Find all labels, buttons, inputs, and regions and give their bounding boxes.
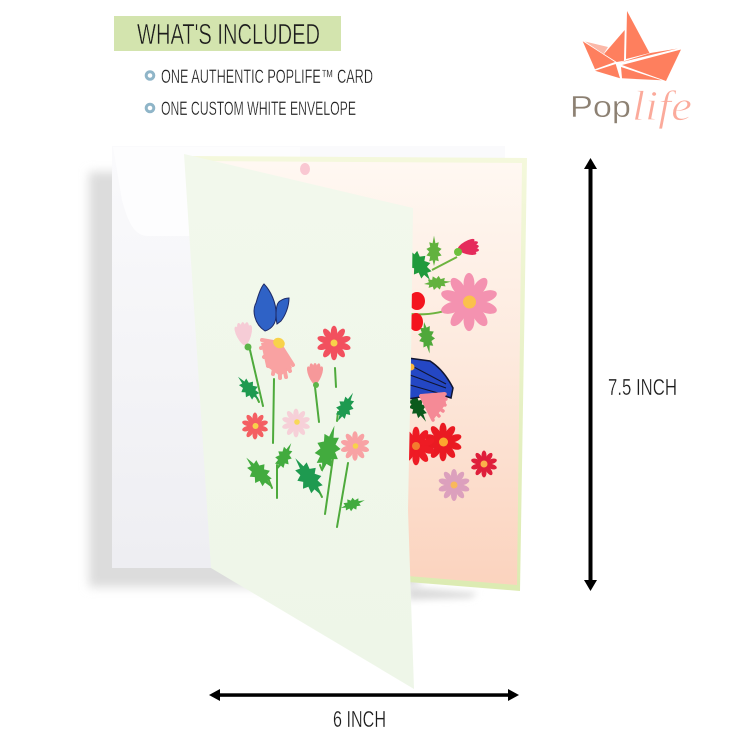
item 1: ONE AUTHENTIC POPLIFE™ CARD [161,67,373,88]
butterfly [254,284,289,331]
pale tulip [232,321,256,350]
envelope body [112,146,505,568]
pink fan flower [421,392,446,420]
blue butterfly [408,358,453,399]
panel: envelope with shadow [89,146,505,587]
red daisy [317,326,351,360]
coral tulip [305,363,325,388]
leaves [399,236,452,426]
heading text: WHAT'S INCLUDED [137,19,320,51]
pale daisy [281,409,311,437]
logo: poplife [570,11,692,130]
red tulip [454,236,480,259]
bullet 2 [146,104,154,112]
height dimension arrow [584,158,597,591]
wordmark life: life [632,84,692,130]
card pink interior [190,161,522,585]
width label: 6 INCH [333,706,386,732]
wordmark pop: Pop [570,89,631,124]
small red daisy [470,451,498,477]
envelope shadow [89,172,419,587]
coral daisy [241,413,269,439]
hidden flower tip [300,163,310,175]
card shadow [408,587,478,600]
envelope flap [113,147,300,236]
coneflower [261,336,293,378]
bullet 1 [146,72,154,79]
cover paper [184,154,414,689]
card green edge [190,156,527,591]
panel: card front cover [184,154,414,689]
stems [250,350,348,527]
leaves [232,371,367,514]
panel: open card back with pop-up flowers [190,156,527,600]
origami boat [583,11,681,81]
item 2: ONE CUSTOM WHITE ENVELOPE [161,99,356,120]
red daisies [397,423,462,465]
height label: 7.5 INCH [608,374,677,400]
width dimension arrow [209,689,519,701]
faded pink daisy [438,469,470,501]
pink daisy [340,431,370,461]
red petals [409,292,425,331]
pop-up flowers [300,163,498,501]
pink daisy [440,273,498,331]
heading band: what's included [114,16,341,51]
list: included items [146,67,373,120]
